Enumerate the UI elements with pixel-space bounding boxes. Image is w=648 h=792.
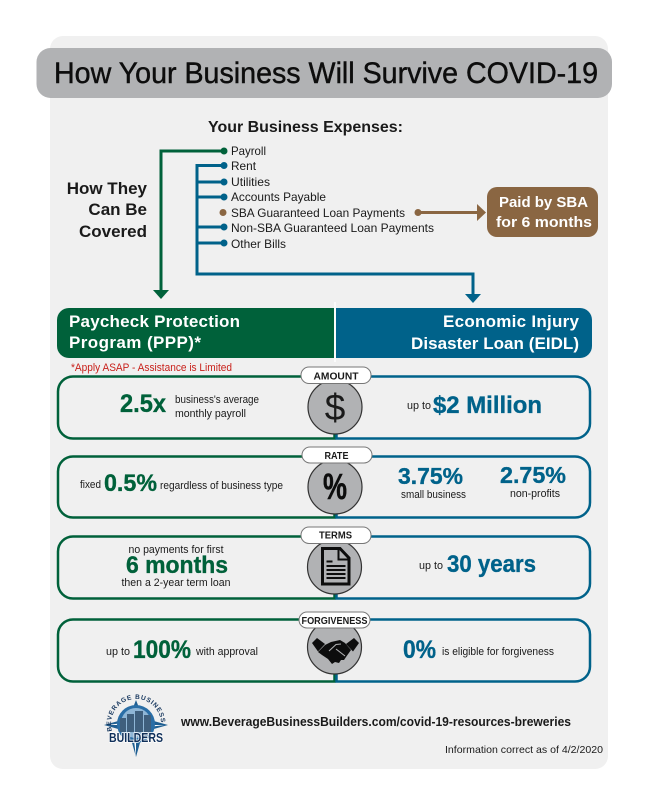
website url: www.BeverageBusinessBuilders.com/covid-19-resources-breweries	[180, 714, 571, 729]
PPP terms: 6 months	[126, 552, 228, 579]
EIDL rate: small business	[398, 463, 466, 501]
title	[36, 48, 612, 98]
panel header: PPP	[57, 308, 334, 358]
PPP rate: regardless of business type	[160, 480, 283, 492]
logo: Beverage Business Builders: BUILDERS	[109, 731, 163, 745]
heading: your business expenses: Your Business Expenses:	[208, 119, 403, 136]
panel header: EIDL: Economic Injury	[443, 312, 580, 331]
EIDL rate: small business: 3.75%	[398, 463, 463, 489]
PPP amount: monthly payroll	[175, 408, 246, 420]
row: amount	[58, 367, 590, 438]
arrow: payroll to PPP	[153, 151, 224, 299]
PPP terms: then a 2-year term loan	[122, 577, 230, 589]
label: terms	[301, 527, 371, 544]
callout: paid by SBA: Paid by SBA	[499, 194, 588, 211]
EIDL rate: non-profits: non-profits	[510, 488, 560, 500]
expenses list: SBA Guaranteed Loan Payments	[231, 206, 405, 220]
heading: how they can be covered: How They	[67, 179, 148, 198]
PPP rate: 0.5%	[104, 470, 157, 497]
panel header: PPP: Paycheck Protection	[69, 312, 240, 331]
label: forgiveness: FORGIVENESS	[302, 616, 368, 627]
arrow: other expenses to EIDL	[197, 166, 481, 303]
expenses list: Other Bills	[231, 237, 286, 251]
EIDL terms: 30 years	[447, 551, 536, 578]
PPP rate: fixed	[80, 479, 101, 491]
EIDL rate: small business: small business	[401, 489, 466, 501]
label: rate	[302, 447, 372, 463]
expenses list: Non-SBA Guaranteed Loan Payments	[231, 221, 434, 235]
arrow: SBA loan payments to callout	[414, 204, 486, 221]
PPP rate	[80, 470, 283, 497]
PPP amount: business's average	[175, 394, 259, 406]
date note: Information correct as of 4/2/2020	[445, 744, 603, 756]
panel: background	[50, 36, 608, 769]
icon: dollar	[308, 380, 362, 434]
label: amount: AMOUNT	[314, 372, 358, 382]
heading: how they can be covered: Covered	[79, 222, 147, 241]
callout: paid by SBA	[487, 187, 598, 237]
PPP amount: 2.5x	[120, 390, 166, 418]
expenses list: Payroll	[231, 144, 266, 158]
PPP amount	[120, 390, 259, 420]
PPP forgiveness: up to	[106, 646, 130, 658]
title: How Your Business Will Survive COVID-19	[54, 57, 598, 90]
EIDL rate: non-profits: 2.75%	[500, 462, 566, 488]
EIDL forgiveness	[403, 636, 554, 664]
row: forgiveness	[58, 612, 590, 682]
icon: dollar: $	[325, 387, 345, 428]
heading: how they can be covered: Can Be	[88, 200, 147, 219]
EIDL forgiveness: 0%	[403, 636, 436, 664]
logo: Beverage Business Builders	[104, 694, 168, 757]
icon: percent: %	[323, 466, 347, 507]
expenses list: Accounts Payable	[231, 190, 326, 204]
heading: how they can be covered	[67, 179, 148, 241]
row: terms	[58, 527, 590, 598]
PPP terms	[122, 544, 230, 589]
PPP forgiveness: with approval	[195, 646, 258, 658]
EIDL forgiveness: is eligible for forgiveness	[442, 646, 554, 658]
expenses list: Rent	[231, 159, 257, 173]
note: apply ASAP: *Apply ASAP - Assistance is Limited	[71, 362, 232, 374]
PPP forgiveness	[106, 636, 258, 664]
logo: Beverage Business Builders: BEVERAGE BUSINESS	[106, 694, 166, 732]
panel header: EIDL: Disaster Loan (EIDL)	[411, 334, 579, 353]
callout: paid by SBA: for 6 months	[496, 214, 592, 231]
icon: handshake	[308, 620, 362, 674]
panel header: PPP: Program (PPP)*	[69, 333, 201, 352]
icon: percent	[308, 460, 362, 514]
panel header: EIDL	[336, 308, 592, 358]
label: terms: TERMS	[319, 530, 352, 542]
PPP terms: no payments for first	[128, 544, 224, 556]
expenses list	[220, 144, 434, 251]
label: rate: RATE	[324, 451, 349, 462]
EIDL amount: up to	[407, 400, 431, 412]
icon: document	[308, 540, 362, 594]
EIDL amount: $2 Million	[433, 392, 542, 419]
expenses list: Utilities	[231, 175, 270, 189]
label: forgiveness	[299, 612, 370, 628]
PPP forgiveness: 100%	[133, 636, 191, 664]
row: rate	[58, 447, 590, 518]
EIDL rate: non-profits	[500, 462, 566, 500]
EIDL terms: up to	[419, 560, 443, 572]
label: amount	[301, 367, 371, 384]
